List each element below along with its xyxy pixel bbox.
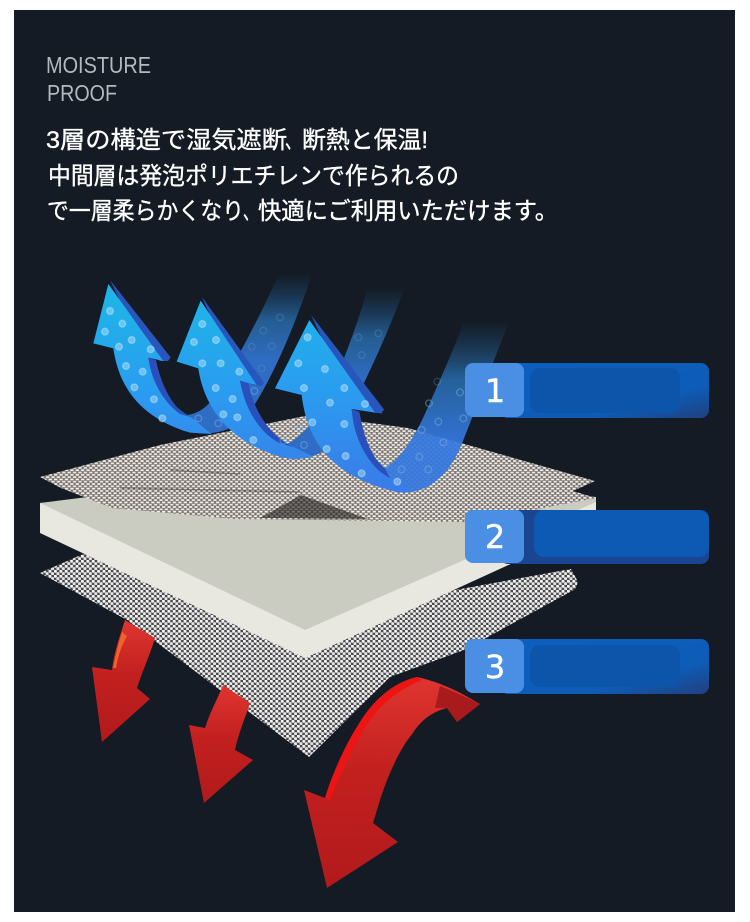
faded droplet rings on tails xyxy=(195,388,467,473)
heading: moisture proof: PROOF xyxy=(47,80,117,106)
description text: 中間層は発泡ポリエチレンで作られるの xyxy=(48,163,459,190)
description text: 、 xyxy=(243,198,258,225)
blue arrow 1 xyxy=(93,275,312,434)
red heat arrows xyxy=(92,620,480,888)
red arrow middle xyxy=(189,685,253,803)
faint droplet rings near tail tops xyxy=(248,314,441,385)
label 2 bar xyxy=(500,510,709,564)
label 1 number badge: 1 xyxy=(485,372,505,410)
description text: 断熱と保温! xyxy=(302,127,428,154)
label 3 xyxy=(465,639,709,694)
heading: moisture proof xyxy=(46,52,151,106)
water droplet rings xyxy=(102,308,401,485)
label 1 number badge xyxy=(465,363,524,417)
description text: で一層柔らかくなり xyxy=(47,198,244,225)
blue moisture arrows xyxy=(93,275,508,493)
description text: 快適にご利用いただけます。 xyxy=(258,198,558,225)
layer 2: foam core xyxy=(40,470,596,658)
layer 1: top mesh sheet xyxy=(40,415,596,522)
heading: moisture proof: MOISTURE xyxy=(46,52,151,78)
label 1 bar xyxy=(500,363,709,418)
layer 3: bottom mesh sheet xyxy=(40,554,577,757)
red arrow right curved xyxy=(304,677,480,888)
label 1 xyxy=(465,363,709,418)
layered material diagram xyxy=(40,415,596,757)
description text: 、 xyxy=(285,127,301,154)
description text xyxy=(46,127,558,225)
label 2 number badge: 2 xyxy=(485,518,505,556)
label 2 xyxy=(465,510,709,564)
label 3 bar xyxy=(500,639,709,694)
description text: 3層の構造で湿気遮断 xyxy=(46,127,287,154)
label 3 number badge: 3 xyxy=(485,648,505,686)
blue arrow 3 xyxy=(275,315,508,493)
label 2 number badge xyxy=(465,510,524,563)
label 3 number badge xyxy=(465,639,524,693)
red arrow left xyxy=(92,620,155,742)
blue arrow 2 xyxy=(177,287,405,459)
